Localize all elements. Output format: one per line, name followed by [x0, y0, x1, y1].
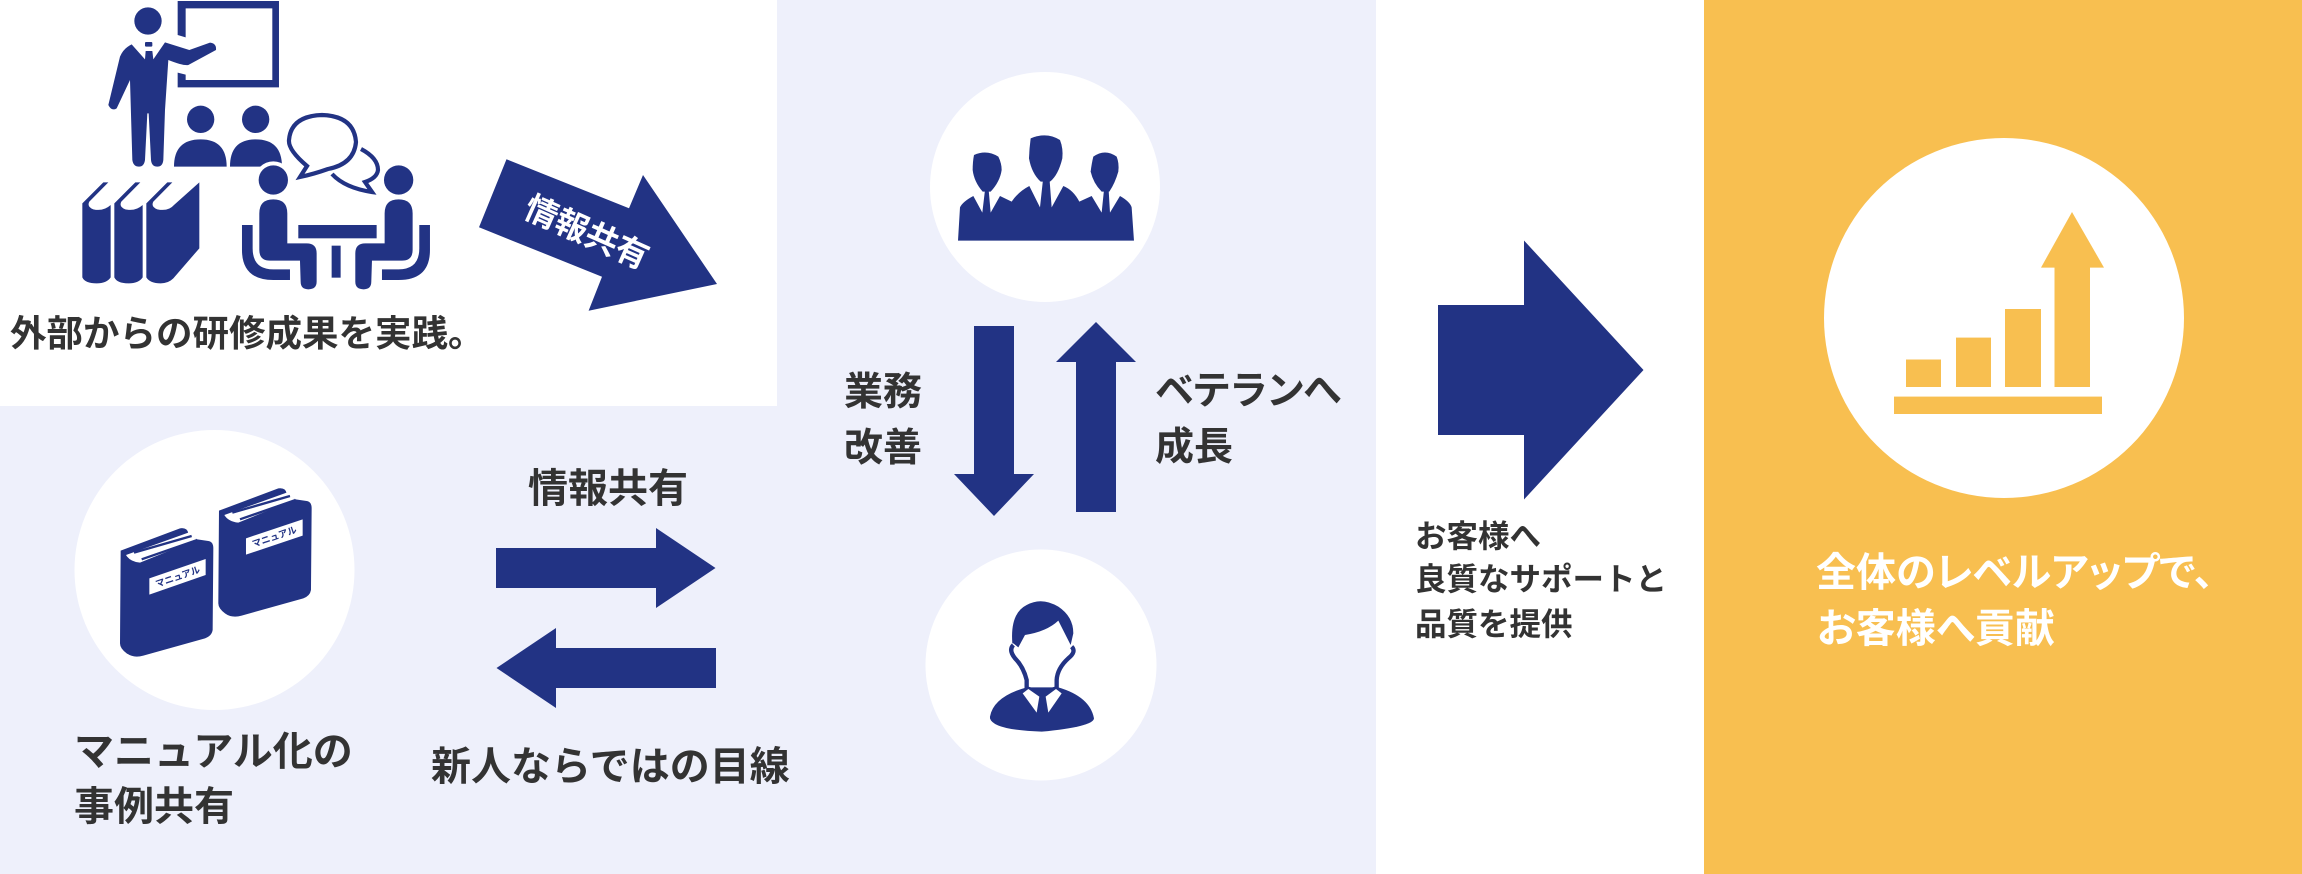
circle: manuals [74, 430, 354, 710]
panel: contribution [1704, 0, 2302, 874]
text: quality support for customers: お客様へ [1415, 518, 1541, 554]
text: business improvement: 改善 [844, 427, 922, 470]
icon: growth chart [1894, 212, 2104, 414]
text: business improvement: 業務 [844, 371, 922, 414]
circle: newcomer [926, 550, 1156, 780]
text: growth to veteran: ベテランへ [1155, 370, 1341, 413]
text: training caption: 外部からの研修成果を実践。 [10, 313, 484, 354]
text: company-wide level up: 全体のレベルアップで、 [1816, 551, 2214, 595]
icon: presenter with board [108, 1, 282, 167]
text: manual case sharing: 事例共有 [74, 785, 234, 829]
icon: speech bubbles [289, 115, 378, 192]
arrow: up [1056, 322, 1136, 512]
text: diagonal arrow label: 情報共有 [519, 189, 655, 276]
text: information sharing label: 情報共有 [528, 467, 688, 511]
text: company-wide level up: お客様へ貢献 [1817, 607, 2055, 651]
text: quality support for customers: 品質を提供 [1415, 606, 1573, 642]
arrow: large right [1438, 240, 1644, 500]
icon: manual books: マニュアル [154, 564, 202, 589]
icon: manual books: マニュアル [251, 524, 299, 549]
icon: three books [82, 182, 199, 283]
icon: meeting at table [242, 161, 430, 289]
circle: growth chart backdrop [1824, 138, 2184, 498]
text: manual case sharing: マニュアル化の [74, 730, 353, 774]
arrow: down [954, 326, 1034, 516]
arrow: right [496, 528, 716, 608]
arrow: left [496, 628, 716, 708]
icon: veteran group [958, 135, 1134, 241]
text: growth to veteran: 成長 [1155, 426, 1233, 469]
panel: external training [0, 0, 777, 406]
text: quality support for customers: 良質なサポートと [1415, 561, 1667, 597]
panel: lavender knowledge exchange [0, 0, 1376, 874]
arrow: diagonal information sharing [479, 159, 717, 311]
text: newcomer viewpoint: 新人ならではの目線 [431, 745, 790, 789]
circle: veterans [930, 72, 1160, 302]
icon: manual books [120, 488, 312, 657]
icon: newcomer person [990, 601, 1094, 732]
